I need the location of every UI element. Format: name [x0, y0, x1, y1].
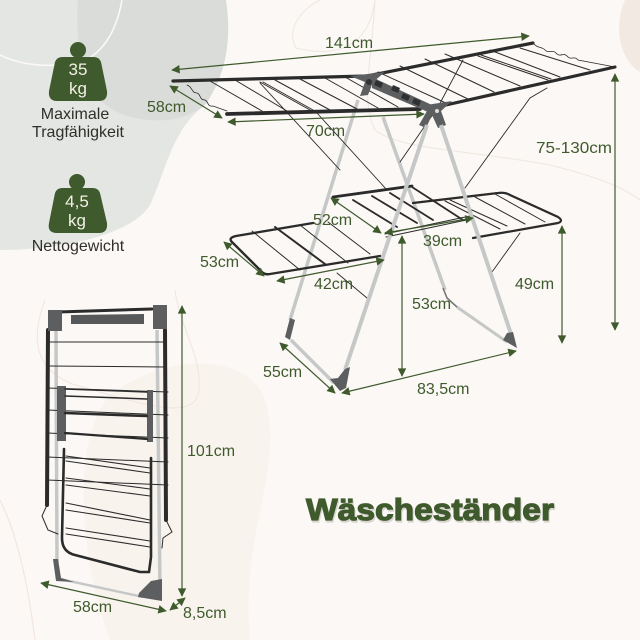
dimension: 58cm folded: 58cm: [73, 599, 112, 616]
dimension: 53cm height: [402, 236, 451, 376]
right rack: [413, 193, 561, 238]
dimension: 49cm: [515, 226, 562, 343]
dimension: 58cm: [147, 86, 222, 118]
outer frame: [47, 330, 166, 520]
icon: weight 35 kg: kg: [69, 79, 87, 98]
lower panel: [62, 449, 151, 572]
dimension: 42cm: 42cm: [314, 276, 353, 293]
upper rack rods: [187, 43, 615, 111]
dimension: 75-130cm: 75-130cm: [536, 140, 612, 157]
dimension: 8,5cm: 8,5cm: [183, 605, 227, 622]
dimension: 8,5cm: [170, 598, 227, 622]
title: Wäscheständer: [306, 492, 554, 527]
dimension: 53cm height: 53cm: [412, 296, 451, 313]
frame legs: [260, 60, 547, 342]
dimension: 53cm depth: 53cm: [200, 254, 239, 271]
top bar: [58, 309, 152, 312]
central hub: [350, 72, 452, 128]
label: maximum load: Tragfähigkeit: [32, 124, 124, 141]
dimension: 42cm: [277, 260, 384, 293]
label: maximum load: Maximale: [41, 106, 109, 123]
dimension: 53cm depth: [200, 242, 264, 276]
dimension: 39cm: [385, 218, 473, 250]
icon: weight 35 kg: [49, 42, 107, 101]
icon: weight 35 kg: 35: [69, 60, 87, 79]
drying rack: folded: [42, 305, 172, 601]
dimension: 141cm: [172, 35, 529, 70]
dimension: 70cm: 70cm: [306, 123, 345, 140]
dimension: 39cm: 39cm: [423, 233, 462, 250]
icon: weight 4,5 kg: 4,5: [65, 192, 89, 211]
dimension: 52cm: 52cm: [313, 212, 352, 229]
dimension: 52cm: [313, 198, 381, 233]
dimension: 101cm: 101cm: [187, 443, 235, 460]
left rack: [231, 223, 380, 274]
dimension: 83,5cm: [342, 351, 516, 398]
lower racks: [231, 186, 561, 274]
label: net weight: Nettogewicht: [32, 238, 125, 255]
dimension: 55cm: 55cm: [263, 364, 302, 381]
feet: [60, 579, 143, 597]
dimension: 58cm: 58cm: [147, 99, 186, 116]
icon: weight 4,5 kg: [49, 174, 107, 233]
dimension: 83,5cm: 83,5cm: [417, 381, 469, 398]
centre rack: [333, 186, 412, 197]
dimension: 49cm: 49cm: [515, 276, 554, 293]
drying rack: open: [173, 43, 615, 391]
front legs: [285, 125, 517, 391]
dimension: 55cm: [263, 343, 335, 393]
middle panel: [57, 386, 66, 441]
dimension: 141cm: 141cm: [325, 35, 373, 52]
dimension: 70cm: [228, 114, 424, 140]
upper rack bars: [173, 43, 615, 114]
icon: weight 4,5 kg: kg: [68, 211, 86, 230]
title: Wäscheständer: [307, 494, 555, 529]
dimension: 58cm folded: [41, 583, 166, 616]
